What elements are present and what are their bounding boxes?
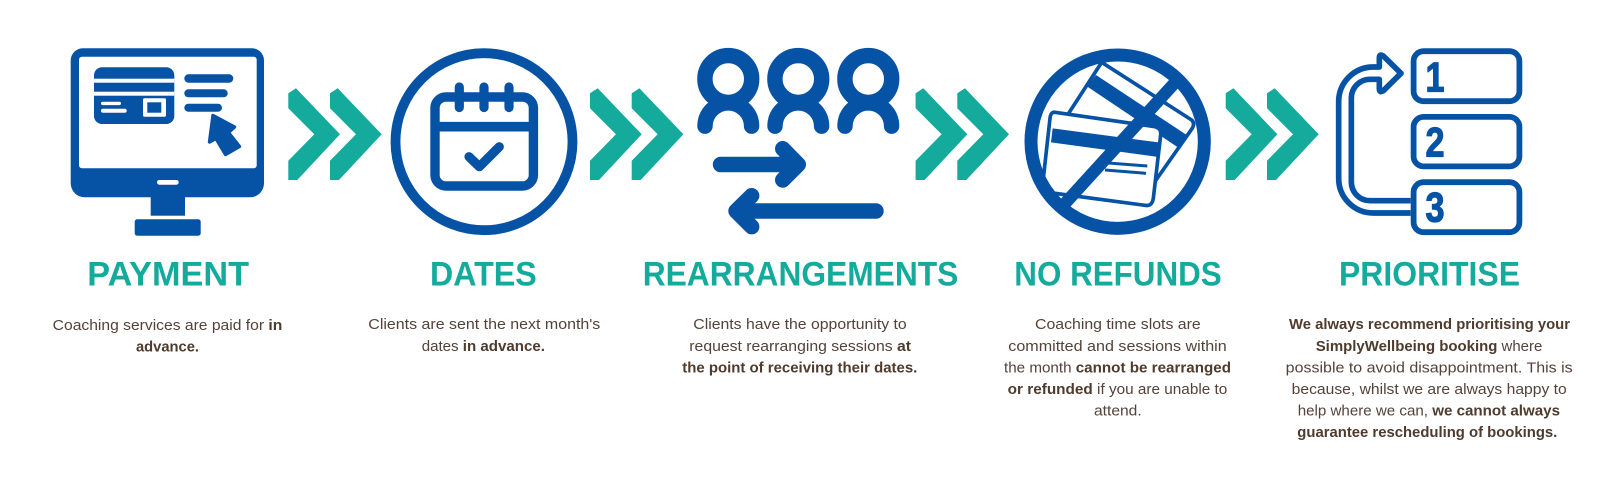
text: no refunds description: attend.	[1094, 403, 1142, 420]
heading: no refunds: NO REFUNDS	[1014, 256, 1222, 294]
text: payment description	[53, 317, 282, 356]
text: no refunds description	[1004, 316, 1231, 420]
arrow: chevrons 2	[590, 88, 683, 180]
icon: priority list with return arrow: 2	[1426, 118, 1444, 166]
heading: prioritise: PRIORITISE	[1339, 256, 1520, 294]
text: rearrangements description: request rearranging sessions at	[689, 338, 911, 355]
text: prioritise description: help where we can, we cannot always	[1298, 403, 1560, 420]
text: rearrangements description	[682, 316, 917, 376]
icon: three people with swap arrows	[705, 56, 892, 227]
text: dates description	[368, 316, 601, 355]
text: dates description: dates in advance.	[422, 338, 545, 355]
icon: priority list with return arrow	[1339, 51, 1519, 232]
text: no refunds description: Coaching time slots are	[1035, 316, 1201, 333]
panel: no refunds	[1004, 55, 1231, 420]
text: prioritise description: possible to avoid disappointment. This is	[1286, 359, 1573, 376]
icon: crossed out credit cards	[1031, 55, 1204, 228]
arrow: chevrons 4	[1226, 88, 1319, 180]
text: no refunds description: or refunded if you are unable to	[1008, 381, 1227, 398]
panel: payment	[53, 48, 282, 356]
icon: calendar in circle	[396, 53, 572, 230]
heading: dates: DATES	[430, 256, 537, 294]
text: prioritise description: guarantee rescheduling of bookings.	[1297, 424, 1557, 441]
text: payment description: Coaching services are paid for in	[53, 317, 282, 334]
panel: prioritise	[1286, 51, 1573, 441]
arrow: chevrons 1	[288, 88, 382, 180]
text: dates description: Clients are sent the next month's	[368, 316, 601, 333]
text: prioritise description	[1286, 316, 1573, 441]
text: prioritise description: We always recommend prioritising your	[1289, 316, 1570, 333]
panel: rearrangements	[643, 56, 958, 376]
text: payment description: advance.	[136, 338, 199, 356]
text: prioritise description: SimplyWellbeing booking where	[1316, 338, 1542, 355]
icon: priority list with return arrow: 1	[1426, 54, 1444, 100]
arrow: chevrons 3	[916, 88, 1009, 180]
text: no refunds description: the month cannot be rearranged	[1004, 359, 1231, 376]
text: no refunds description: committed and sessions within	[1008, 338, 1227, 355]
text: prioritise description: because, whilst we are always happy to	[1292, 381, 1567, 398]
heading: payment: PAYMENT	[87, 256, 249, 294]
heading: rearrangements: REARRANGEMENTS	[643, 256, 958, 294]
icon: priority list with return arrow: 3	[1426, 184, 1444, 231]
text: rearrangements description: the point of receiving their dates.	[682, 359, 917, 376]
panel: dates	[368, 53, 601, 355]
icon: computer monitor with card payment	[71, 48, 264, 236]
text: rearrangements description: Clients have the opportunity to	[693, 316, 907, 333]
